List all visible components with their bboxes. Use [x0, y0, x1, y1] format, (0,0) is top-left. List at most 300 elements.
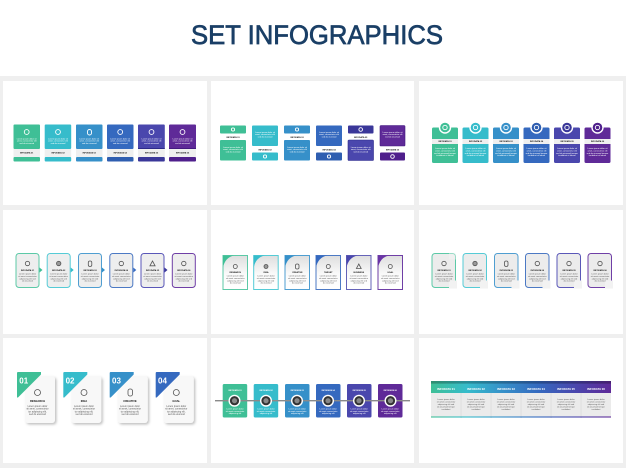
card 1: Lorem ipsum dolor: [226, 408, 244, 410]
card 03 creative: CREATIVE: [123, 399, 137, 403]
card 6: INFODATA 06: [384, 389, 398, 392]
card 2: Lorem ipsum dolor: [466, 272, 484, 276]
card 1: INFODATA 01: [20, 152, 34, 155]
card 4: [107, 124, 134, 162]
card 6: do eiusmod: [595, 281, 606, 283]
card 2: sed do eiusmod: [51, 143, 66, 145]
card 03 creative: tur adipiscing elit,: [121, 410, 140, 413]
column 2: sit amet consectetur: [467, 400, 486, 404]
card 1: sed do eiusmod: [19, 143, 35, 145]
panel: cards with top circle badges: [419, 81, 623, 205]
card 6: incididunt ut labore: [589, 154, 607, 157]
column 6: INFODATA 06: [587, 387, 605, 391]
card 6: adipiscing elit sed: [176, 277, 193, 280]
card 6: [378, 256, 402, 290]
card 5: adipiscing elit sed: [351, 279, 368, 282]
column 5: [557, 387, 576, 411]
card 2: amet, consectetur elit: [466, 149, 486, 152]
card 3: Lorem ipsum dolor: [498, 272, 515, 276]
card 1: sit amet consectetur: [435, 275, 454, 278]
card 4: Lorem ipsum dolor: [113, 272, 130, 276]
card 2: adipiscing elit sed: [50, 277, 68, 280]
column 3: do eiusmod tempor: [497, 406, 515, 408]
card 1: sit amet consectetur: [18, 275, 37, 278]
card 4: Lorem ipsum dolor: [529, 272, 546, 276]
card 1: [432, 252, 457, 288]
column 2: Lorem ipsum dolor: [467, 398, 485, 401]
card 02 idea: [63, 372, 101, 423]
card 1: [14, 124, 40, 162]
card 6: adipiscing elit: [384, 412, 397, 415]
card 5: sit amet consectetur: [560, 275, 579, 278]
column 2: INFODATA 02: [467, 387, 485, 391]
column 1: INFODATA 01: [437, 387, 455, 391]
card 6: Lorem ipsum dolor: [382, 408, 399, 410]
card 02 idea: IDEA: [81, 399, 87, 403]
card 6: Lorem ipsum dolor: [175, 272, 193, 276]
card 3: adipiscing elit sed: [82, 277, 99, 280]
card 2: adipiscing elit sed: [467, 277, 484, 280]
card 6: adipiscing elit sed: [592, 277, 609, 280]
card 6: sit amet consectetur: [174, 275, 193, 278]
card 01 research: RESEARCH: [30, 399, 45, 403]
card 3: adipiscing elit: [291, 412, 304, 415]
card 6: amet, consectetur elit: [588, 149, 608, 152]
card 3: INFODATA 03: [500, 269, 514, 272]
panel: outlined cards with arrows: [3, 210, 207, 334]
card 1: sed do eiusmod tempor: [434, 152, 456, 155]
card 1: [220, 126, 246, 160]
column 2: [467, 387, 486, 411]
card 5: amet, consectetur elit: [557, 149, 577, 152]
table body: [431, 393, 611, 417]
card 3: incididunt ut labore: [497, 154, 516, 157]
card 6: sit amet consectetur: [591, 275, 610, 278]
card 4: [316, 384, 340, 418]
card 6: INFODATA 06: [591, 140, 605, 143]
timeline markers: [228, 395, 396, 407]
card 04 goal: 04: [158, 376, 167, 385]
card 3: sed do eiusmod: [290, 151, 305, 153]
card 5: INFODATA 05: [562, 269, 576, 272]
timeline line: [215, 400, 410, 401]
title: SET INFOGRAPHICS: [191, 20, 443, 50]
card 2: INFODATA 02: [51, 152, 65, 155]
card 2: Lorem ipsum dolor sit: [48, 138, 68, 140]
card 4: adipiscing elit sed: [113, 277, 130, 280]
card 02 idea: sed do eiusmod: [76, 413, 93, 416]
card 4: Lorem ipsum dolor sit: [110, 138, 131, 140]
card 4: do eiusmod: [532, 281, 544, 283]
card 3: Lorem ipsum dolor sit: [496, 147, 516, 150]
card 2: sit amet consectetur: [257, 410, 276, 413]
card 04 goal: [156, 372, 194, 423]
card 1: do eiusmod: [22, 281, 34, 283]
column 3: adipiscing elit sed: [498, 403, 515, 406]
card 5: Lorem ipsum dolor: [351, 408, 368, 410]
card 3: sit amet consectetur: [288, 410, 307, 413]
card 2: IDEA: [264, 271, 269, 274]
card 1: amet, consectetur elit: [223, 148, 243, 151]
card 4: sed do eiusmod: [322, 136, 337, 138]
card 2: sed do eiusmod tempor: [465, 152, 487, 155]
card 5: Lorem ipsum dolor sit: [351, 146, 371, 149]
card 6: amet, consectetur elit: [173, 140, 193, 143]
column 4: adipiscing elit sed: [528, 403, 545, 406]
card 5: sed do eiusmod tempor: [556, 152, 578, 155]
card 5: do eiusmod: [564, 281, 575, 283]
card 2: do eiusmod: [261, 283, 272, 285]
card 4: INFODATA 04: [322, 389, 336, 392]
card 3: Lorem ipsum dolor: [289, 408, 306, 410]
column 6: [587, 387, 606, 411]
card 2: Lorem ipsum dolor: [257, 408, 275, 410]
column 3: incididunt: [502, 408, 511, 411]
card 1: Lorem ipsum dolor sit: [223, 146, 243, 149]
card 6: [584, 121, 610, 163]
card 5: INFODATA 05: [145, 152, 159, 155]
card 4: do eiusmod: [323, 283, 335, 285]
card 6: Lorem ipsum dolor: [382, 274, 399, 278]
column 5: incididunt: [562, 408, 571, 411]
card 6: do eiusmod: [178, 281, 190, 283]
card 1: Lorem ipsum dolor: [19, 272, 36, 276]
card 3: INFODATA 03: [291, 389, 305, 392]
card 3: do eiusmod: [85, 281, 96, 283]
card 6: [378, 384, 402, 418]
column 4: Lorem ipsum dolor: [527, 398, 545, 401]
card 2: [462, 121, 488, 163]
card 2: [252, 126, 278, 160]
card 6: [588, 254, 613, 288]
card 6: [172, 254, 195, 288]
card 03 creative: [110, 372, 148, 423]
card 5: Lorem ipsum dolor: [560, 272, 578, 276]
header band with dark top bar: [431, 381, 611, 393]
card 1: [223, 384, 247, 418]
card 2: sit amet consectetur: [49, 275, 68, 278]
card 2: sed do eiusmod: [258, 136, 273, 138]
card 5: [347, 384, 372, 418]
card 04 goal: tur adipiscing elit,: [167, 410, 186, 413]
card 4: INFODATA 04: [322, 148, 336, 151]
card 1: Lorem ipsum dolor: [435, 272, 453, 276]
card 2: Lorem ipsum dolor sit: [466, 147, 486, 150]
card 2: [254, 384, 278, 418]
card 3: Lorem ipsum dolor sit: [79, 138, 100, 140]
card 3: INFODATA 03: [499, 140, 513, 143]
card 5: do eiusmod: [147, 281, 159, 283]
card 3: adipiscing elit sed: [289, 279, 306, 282]
card 3: [284, 126, 310, 160]
card 1: sit amet consectetur: [226, 410, 245, 413]
card 04 goal: GOAL: [172, 399, 181, 403]
card 2: do eiusmod: [470, 281, 481, 283]
card 4: TARGET: [324, 271, 333, 274]
card 4: INFODATA 04: [115, 269, 129, 272]
column 3: INFODATA 03: [497, 387, 515, 391]
card 6: adipiscing elit sed: [382, 279, 399, 282]
card 4: [316, 256, 340, 290]
card 3: sed do eiusmod tempor: [495, 152, 517, 155]
card 1: [16, 254, 42, 288]
card 1: do eiusmod: [439, 281, 450, 283]
column 6: incididunt: [592, 408, 601, 411]
card 5: [141, 254, 168, 288]
card 5: amet, consectetur elit: [351, 148, 371, 151]
card 04 goal: sed do eiusmod: [168, 413, 185, 416]
card 5: sed do eiusmod: [353, 151, 369, 153]
card 03 creative: 03: [112, 376, 121, 385]
card 01 research: Lorem ipsum dolor: [28, 405, 48, 408]
card 2: adipiscing elit sed: [258, 279, 275, 282]
card 1: RESEARCH: [229, 271, 242, 274]
card 6: [380, 126, 405, 160]
card 04 goal: Lorem ipsum dolor: [166, 405, 186, 408]
card 5: [346, 256, 371, 290]
card 1: [223, 256, 248, 290]
card 4: INFODATA 04: [531, 269, 545, 272]
card 3: amet, consectetur elit: [287, 148, 307, 151]
card 3: sit amet consectetur: [81, 275, 100, 278]
card 3: do eiusmod: [292, 283, 304, 285]
card 5: Lorem ipsum dolor: [144, 272, 161, 276]
card 4: sit amet consectetur: [528, 275, 547, 278]
bottom bar: [431, 416, 611, 418]
card 2: amet, consectetur elit: [48, 140, 68, 143]
card 6: sit amet consectetur: [381, 410, 400, 413]
card 5: [557, 254, 582, 288]
card 5: do eiusmod: [353, 283, 365, 285]
column 6: adipiscing elit sed: [588, 403, 605, 406]
card 1: adipiscing elit sed: [436, 277, 453, 280]
card 5: BUSINESS: [353, 272, 365, 274]
card 2: INFODATA 02: [468, 269, 482, 272]
column 6: do eiusmod tempor: [587, 406, 605, 408]
card 03 creative: Lorem ipsum dolor: [120, 405, 140, 408]
card 4: Lorem ipsum dolor: [320, 274, 337, 278]
card 4: amet, consectetur elit: [110, 140, 130, 143]
column 3: [497, 387, 516, 411]
card 4: INFODATA 04: [530, 140, 544, 143]
card 6: sed do eiusmod: [385, 136, 401, 138]
card 1: sit amet consectetur: [226, 277, 245, 280]
card 5: sit amet consectetur: [143, 275, 162, 278]
card 3: [78, 254, 105, 288]
card 3: INFODATA 03: [83, 152, 97, 155]
card 6: INFODATA 06: [177, 269, 191, 272]
card 3: [285, 384, 310, 418]
card 4: [526, 254, 550, 288]
column 4: [527, 387, 546, 411]
panel: table with gradient header: [419, 338, 623, 463]
card 6: do eiusmod: [385, 283, 397, 285]
card 5: sit amet consectetur: [349, 277, 368, 280]
card 5: Lorem ipsum dolor sit: [557, 147, 577, 150]
card 4: [524, 121, 550, 163]
card 4: adipiscing elit sed: [529, 277, 546, 280]
card 5: [554, 121, 580, 163]
column 5: adipiscing elit sed: [558, 403, 575, 406]
card 4: INFODATA 04: [114, 152, 128, 155]
column 4: INFODATA 04: [527, 387, 545, 391]
card 3: [285, 256, 310, 290]
card 3: [493, 121, 519, 163]
column 2: adipiscing elit sed: [468, 403, 485, 406]
card 2: [45, 124, 71, 162]
card 01 research: 01: [19, 376, 29, 385]
column 4: do eiusmod tempor: [527, 406, 545, 408]
card 02 idea: tur adipiscing elit,: [75, 410, 94, 413]
card 3: Lorem ipsum dolor sit: [287, 146, 307, 149]
card 5: adipiscing elit sed: [144, 277, 162, 280]
card 4: incididunt ut labore: [528, 154, 546, 157]
card 3: CREATIVE: [292, 271, 303, 274]
column 5: do eiusmod tempor: [557, 406, 575, 408]
card 4: [316, 126, 342, 160]
card 4: Lorem ipsum dolor sit: [319, 131, 339, 134]
card 6: Lorem ipsum dolor: [591, 272, 609, 276]
card 4: amet, consectetur elit: [527, 149, 547, 152]
column 2: do eiusmod tempor: [467, 406, 485, 408]
card 2: [47, 254, 74, 288]
card 5: Lorem ipsum dolor sit: [142, 138, 162, 140]
card 6: sit amet consectetur: [381, 277, 400, 280]
card 2: [254, 256, 278, 290]
card 4: sit amet consectetur: [112, 275, 131, 278]
card 4: sit amet consectetur: [319, 410, 338, 413]
card 1: INFODATA 01: [438, 140, 452, 143]
column 2: incididunt: [472, 408, 481, 411]
column 1: adipiscing elit sed: [438, 403, 455, 406]
card 4: adipiscing elit: [322, 412, 335, 415]
card 3: sit amet consectetur: [288, 277, 307, 280]
card 6: GOAL: [387, 271, 394, 274]
card 1: INFODATA 01: [21, 269, 35, 272]
column 1: Lorem ipsum dolor: [437, 398, 455, 401]
card 3: INFODATA 03: [290, 136, 304, 139]
card 6: Lorem ipsum dolor sit: [588, 147, 608, 150]
card 2: sit amet consectetur: [257, 277, 276, 280]
card 1: adipiscing elit: [229, 412, 242, 415]
card 6: Lorem ipsum dolor sit: [383, 131, 403, 134]
card 3: do eiusmod: [501, 281, 513, 283]
card 1: [432, 121, 458, 163]
card 3: Lorem ipsum dolor: [81, 272, 99, 276]
card 5: [138, 124, 165, 162]
panel: timeline cards: [211, 338, 414, 463]
panel: four numbered cards: [3, 338, 207, 463]
card 2: adipiscing elit: [260, 412, 273, 415]
card 1: adipiscing elit sed: [19, 277, 37, 280]
card 2: INFODATA 02: [52, 269, 66, 272]
card 4: Lorem ipsum dolor sit: [527, 147, 547, 150]
card 1: Lorem ipsum dolor: [227, 274, 244, 278]
card 5: sit amet consectetur: [350, 410, 369, 413]
column 1: [437, 387, 456, 411]
column 4: incididunt: [532, 408, 541, 411]
card 02 idea: 02: [66, 376, 75, 385]
card 5: INFODATA 05: [146, 269, 160, 272]
card 03 creative: sit amet, consectetur: [119, 408, 141, 411]
card 6: INFODATA 06: [593, 269, 607, 272]
card 4: adipiscing elit sed: [320, 279, 337, 282]
column 3: Lorem ipsum dolor: [497, 398, 515, 401]
card 1: INFODATA 01: [228, 389, 242, 392]
card 02 idea: sit amet, consectetur: [73, 408, 95, 411]
card 4: do eiusmod: [116, 281, 128, 283]
card 3: sed do eiusmod: [82, 143, 97, 145]
card 5: adipiscing elit sed: [561, 277, 578, 280]
column 5: INFODATA 05: [557, 387, 575, 391]
card 3: [76, 124, 102, 162]
card 2: incididunt ut labore: [467, 154, 485, 157]
card 02 idea: Lorem ipsum dolor: [74, 405, 94, 408]
column 4: sit amet consectetur: [527, 400, 546, 404]
card 04 goal: sit amet, consectetur: [165, 408, 188, 411]
card 6: sed do eiusmod tempor: [587, 152, 609, 155]
card 2: Lorem ipsum dolor: [257, 274, 275, 278]
panel: square cards with footer bars: [3, 81, 207, 205]
column 5: sit amet consectetur: [557, 400, 576, 404]
card 3: [494, 254, 520, 288]
card 4: sed do eiusmod: [113, 143, 128, 145]
card 1: incididunt ut labore: [436, 154, 455, 157]
column 1: incididunt: [442, 408, 451, 411]
card 2: INFODATA 02: [469, 140, 483, 143]
card 1: sed do eiusmod: [226, 151, 241, 153]
panel: framed cards with coloured corner: [211, 210, 414, 334]
card 6: INFODATA 06: [176, 152, 190, 155]
card 6: Lorem ipsum dolor sit: [173, 138, 193, 140]
card 2: do eiusmod: [53, 281, 65, 283]
card 3: amet, consectetur elit: [79, 140, 99, 143]
card 5: Lorem ipsum dolor: [350, 274, 368, 278]
card 1: amet, consectetur elit: [17, 140, 37, 143]
column 1: sit amet consectetur: [437, 400, 456, 404]
card 5: INFODATA 05: [354, 136, 368, 139]
card 5: INFODATA 05: [353, 389, 367, 392]
card 1: INFODATA 01: [226, 136, 240, 139]
card 6: [169, 124, 196, 162]
column 6: sit amet consectetur: [587, 400, 606, 404]
card 4: sed do eiusmod tempor: [526, 152, 548, 155]
card 5: incididunt ut labore: [558, 154, 577, 157]
card 4: Lorem ipsum dolor: [320, 408, 337, 410]
card 5: amet, consectetur elit: [142, 140, 162, 143]
card 6: INFODATA 06: [386, 148, 400, 151]
card 2: INFODATA 02: [258, 148, 272, 151]
card 2: sit amet consectetur: [466, 275, 485, 278]
panel: grey cards with partial outlines: [419, 210, 623, 334]
card 01 research: sed do eiusmod: [29, 413, 47, 416]
panel: alternating cards: [211, 81, 414, 205]
card 6: sed do eiusmod: [175, 143, 191, 145]
card 1: Lorem ipsum dolor sit: [435, 147, 455, 150]
card 2: Lorem ipsum dolor sit: [255, 131, 275, 134]
card 01 research: tur adipiscing elit,: [28, 410, 47, 413]
card 1: adipiscing elit sed: [227, 279, 244, 282]
card 1: amet, consectetur elit: [435, 149, 455, 152]
column 1: do eiusmod tempor: [437, 406, 455, 408]
card 3: sit amet consectetur: [497, 275, 516, 278]
card 01 research: [17, 372, 55, 423]
card 5: [348, 126, 374, 160]
card 4: [110, 254, 136, 288]
card 2: Lorem ipsum dolor: [50, 272, 68, 276]
column dividers: [461, 393, 582, 418]
column 6: Lorem ipsum dolor: [587, 398, 605, 401]
